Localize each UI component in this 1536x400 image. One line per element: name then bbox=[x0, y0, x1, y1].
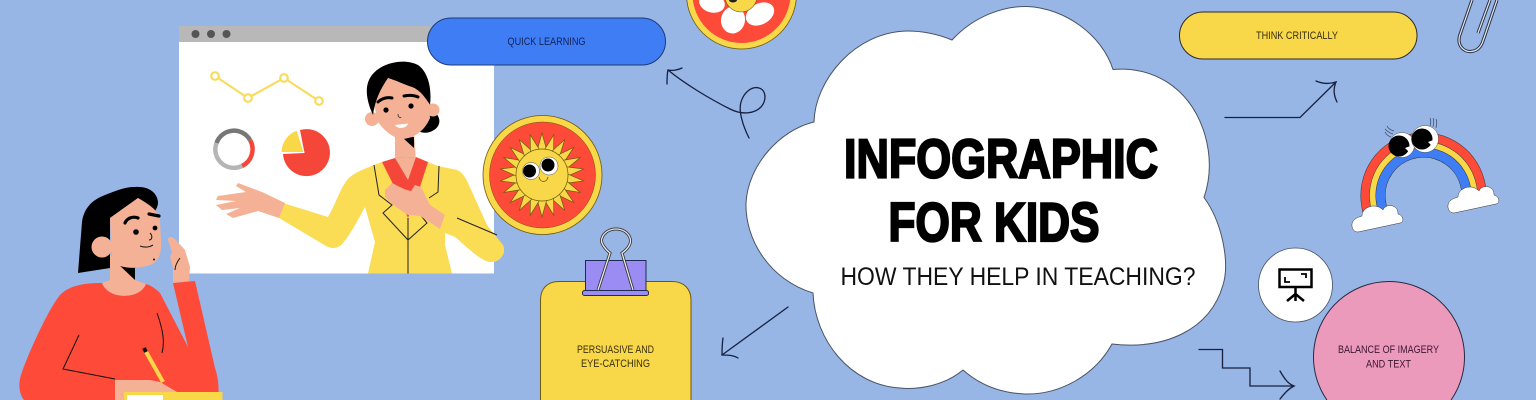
sun eyes bbox=[522, 157, 558, 182]
arrow: to think critically bbox=[1225, 81, 1337, 118]
subtitle: HOW THEY HELP IN TEACHING? bbox=[840, 263, 1196, 291]
rainbow lashes bbox=[1385, 118, 1437, 137]
collar bbox=[382, 157, 428, 218]
neck shadow bbox=[403, 137, 414, 148]
binder clip wire bbox=[598, 229, 633, 290]
notebook bbox=[124, 392, 222, 400]
label: THINK CRITICALLY bbox=[1256, 30, 1339, 42]
left cloud bbox=[1352, 206, 1403, 232]
lapel lines bbox=[374, 165, 497, 274]
rainbow arcs bbox=[1356, 128, 1483, 220]
arrow: stepped to balance circle bbox=[1199, 350, 1294, 399]
icon: presentation board bbox=[1258, 248, 1332, 322]
neck bbox=[395, 132, 416, 162]
label: BALANCE OF IMAGERY bbox=[1338, 344, 1440, 356]
raised hand bbox=[168, 237, 190, 283]
finger line bbox=[175, 258, 180, 270]
title bbox=[844, 128, 1158, 253]
student neck bbox=[102, 255, 146, 296]
teacher character bbox=[216, 62, 504, 273]
title: INFOGRAPHIC bbox=[844, 128, 1158, 190]
rainbow eyes bbox=[1388, 126, 1438, 158]
pill: quick learning bbox=[428, 18, 666, 65]
badge face bbox=[490, 122, 596, 228]
paper clip: binder card: EYE-CATCHING bbox=[581, 358, 650, 370]
card label: PERSUASIVE AND bbox=[577, 344, 654, 356]
sun badge bbox=[483, 116, 602, 234]
paper clip: binder card bbox=[540, 229, 691, 400]
donut chart bbox=[215, 131, 253, 168]
petals bbox=[699, 0, 774, 34]
title: FOR KIDS bbox=[888, 191, 1100, 253]
right cloud bbox=[1448, 187, 1499, 213]
student face bbox=[110, 198, 161, 268]
circle: balance of imagery and text bbox=[1314, 282, 1464, 400]
window body bbox=[179, 42, 494, 274]
sun rays bbox=[500, 133, 584, 217]
flower ring bbox=[686, 0, 796, 49]
flower center bbox=[725, 0, 757, 12]
student hair bbox=[78, 187, 158, 273]
flower badge bbox=[686, 0, 796, 49]
rainbow bbox=[1352, 118, 1499, 232]
flower eye bbox=[729, 0, 737, 2]
line chart bbox=[211, 72, 323, 105]
arrow: to persuasive card bbox=[722, 307, 788, 358]
student sweater bbox=[19, 281, 219, 400]
jacket bbox=[279, 162, 504, 274]
hair bbox=[367, 62, 430, 115]
pencil bbox=[144, 348, 163, 382]
arrow: to quick learning bbox=[667, 68, 765, 138]
binder clip base bbox=[582, 290, 648, 296]
hand on chest bbox=[385, 183, 445, 229]
hair bun bbox=[418, 108, 439, 133]
binder clip body bbox=[586, 260, 646, 290]
sweater fold lines bbox=[63, 313, 163, 379]
neck shadow bbox=[117, 263, 135, 280]
central cloud bbox=[746, 6, 1226, 394]
face bbox=[373, 75, 430, 139]
pie chart bbox=[281, 129, 330, 176]
face features bbox=[378, 95, 418, 128]
student ear bbox=[92, 236, 112, 258]
window dots bbox=[192, 30, 230, 38]
pill: think critically bbox=[1180, 12, 1417, 59]
neck opening bbox=[395, 157, 416, 180]
window title bar bbox=[179, 26, 494, 42]
flower background bbox=[692, 0, 790, 43]
pointing hand bbox=[216, 183, 285, 218]
ears bbox=[365, 104, 440, 126]
presentation window bbox=[179, 26, 494, 274]
student face features bbox=[125, 214, 159, 260]
badge ring bbox=[483, 116, 602, 234]
sun disc bbox=[516, 149, 568, 201]
yellow card bbox=[540, 282, 691, 400]
student character bbox=[19, 187, 222, 400]
label: QUICK LEARNING bbox=[508, 36, 586, 48]
lower hand bbox=[115, 380, 177, 400]
circle: balance of imagery and text: AND TEXT bbox=[1366, 358, 1411, 370]
paper clip bbox=[1459, 0, 1497, 52]
